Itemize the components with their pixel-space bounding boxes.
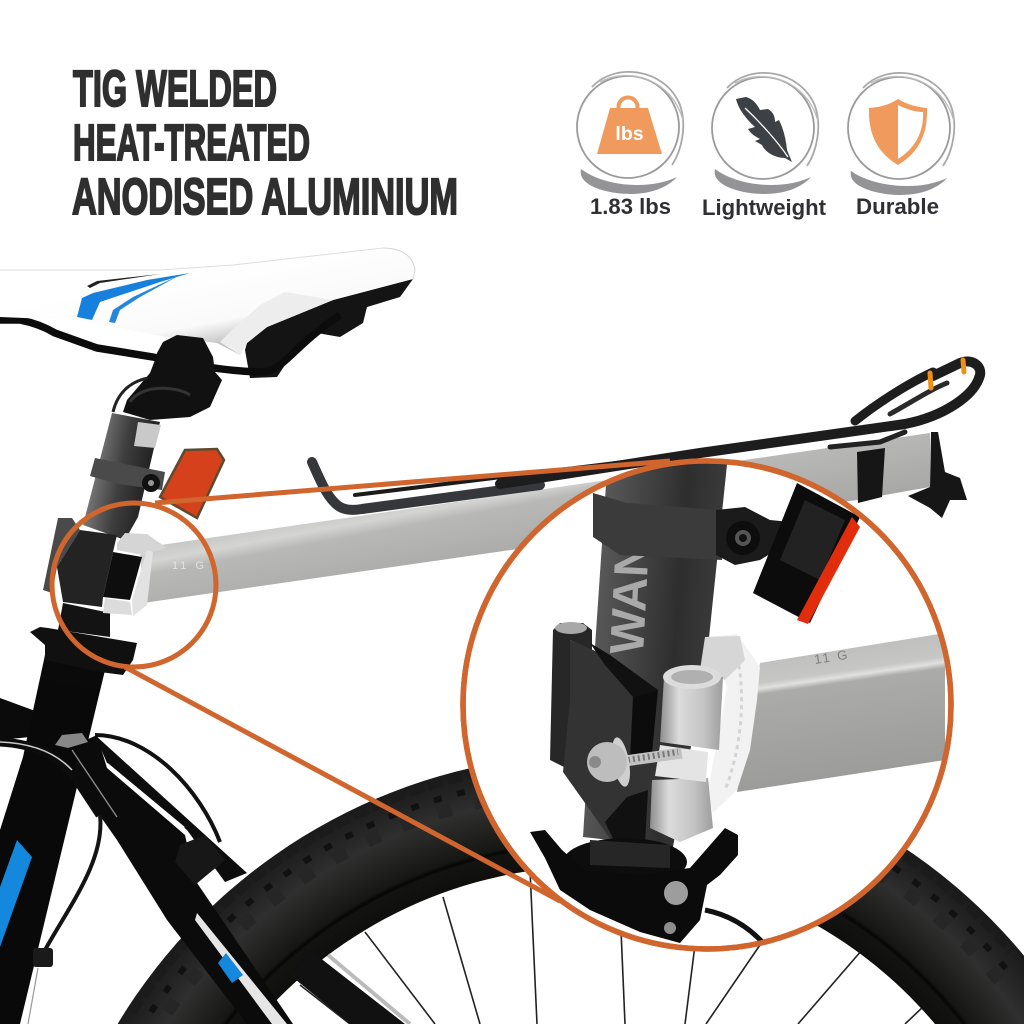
hinge: [43, 518, 80, 593]
black insert: [103, 552, 142, 600]
curved tube: [0, 742, 100, 815]
zoomed bracket: [716, 507, 782, 565]
seatpost sticker: [134, 422, 161, 448]
seat clamp on post: [30, 518, 167, 690]
zoomed reflector: [753, 483, 860, 623]
upper lug back: [700, 636, 745, 680]
title: HEAT-TREATED: [73, 114, 310, 171]
lug highlights: [55, 733, 88, 748]
saddle rails: [0, 315, 340, 372]
icon: feather lightweight: [712, 73, 818, 194]
zoomed clamp body: [563, 640, 640, 839]
main stay tube: [75, 735, 293, 1024]
seatpost: [83, 413, 165, 540]
large magnified circle: [463, 455, 951, 949]
icon labels: 1.83 lbs: [590, 194, 671, 219]
zoomed quick release lever: [530, 828, 738, 943]
title: TIG WELDED: [73, 60, 277, 117]
seat tube blue graphic: [0, 840, 32, 947]
upper silver lug: [117, 533, 167, 556]
small detail circle: [52, 503, 216, 667]
lower cable and clip: [45, 815, 100, 950]
zoomed rack tube: [737, 633, 945, 792]
zoomed seatpost: [583, 455, 728, 847]
silver rack tube: [140, 433, 930, 603]
head tube top: [42, 655, 105, 690]
weld: [132, 550, 153, 616]
top tube: [0, 698, 50, 740]
zoomed hinge: [550, 623, 592, 770]
zoomed band: [593, 493, 722, 560]
upper stay: [95, 735, 247, 882]
icon: weight 1.83 lbs: [577, 72, 683, 194]
icon: shield durable: [848, 73, 954, 195]
clamp front black block: [630, 690, 658, 760]
seat clamp and post head: [113, 335, 222, 420]
zoomed collar: [566, 838, 687, 875]
icon: weight 1.83 lbs: lbs: [615, 123, 644, 145]
collar: [30, 627, 137, 675]
chain stays behind frame: [290, 950, 410, 1024]
stay bridge: [175, 835, 225, 885]
icon labels: Lightweight: [702, 195, 827, 220]
post below clamp: [58, 603, 110, 637]
zoomed bolt: [726, 521, 760, 555]
zoomed cable: [705, 910, 765, 945]
zoomed tube engraved text: 11 G: [813, 647, 850, 667]
icon labels: Durable: [856, 194, 939, 219]
callout connector lines: [125, 461, 670, 901]
lower silver lug: [103, 598, 132, 615]
title: ANODISED ALUMINIUM: [72, 168, 458, 225]
clamp body: [57, 530, 117, 607]
rack top rail and hook: [312, 360, 980, 510]
rear wheel spokes: [300, 870, 925, 1024]
seat tube: [0, 655, 105, 1024]
zoomed lower silver cylinder: [650, 778, 713, 842]
zoomed upper silver cylinder: [660, 677, 723, 750]
title: [72, 60, 458, 225]
white weld: [707, 634, 760, 813]
tube markings: 11 G: [172, 560, 207, 572]
saddle: [0, 248, 415, 355]
seatpost band: [90, 458, 165, 490]
seatpost lettering: WAND: [601, 506, 662, 656]
icon labels: [590, 194, 939, 220]
bicycle frame: [0, 655, 293, 1024]
rear wheel tyre: [118, 754, 1024, 1024]
band bolt: [142, 474, 160, 492]
inner lug: [655, 745, 708, 782]
saddle underside: [245, 279, 413, 378]
brake cable upper: [95, 735, 220, 842]
zoomed bolt and thread: [628, 748, 682, 766]
small red reflector: [160, 449, 224, 518]
rack end strap and knob: [857, 432, 967, 518]
